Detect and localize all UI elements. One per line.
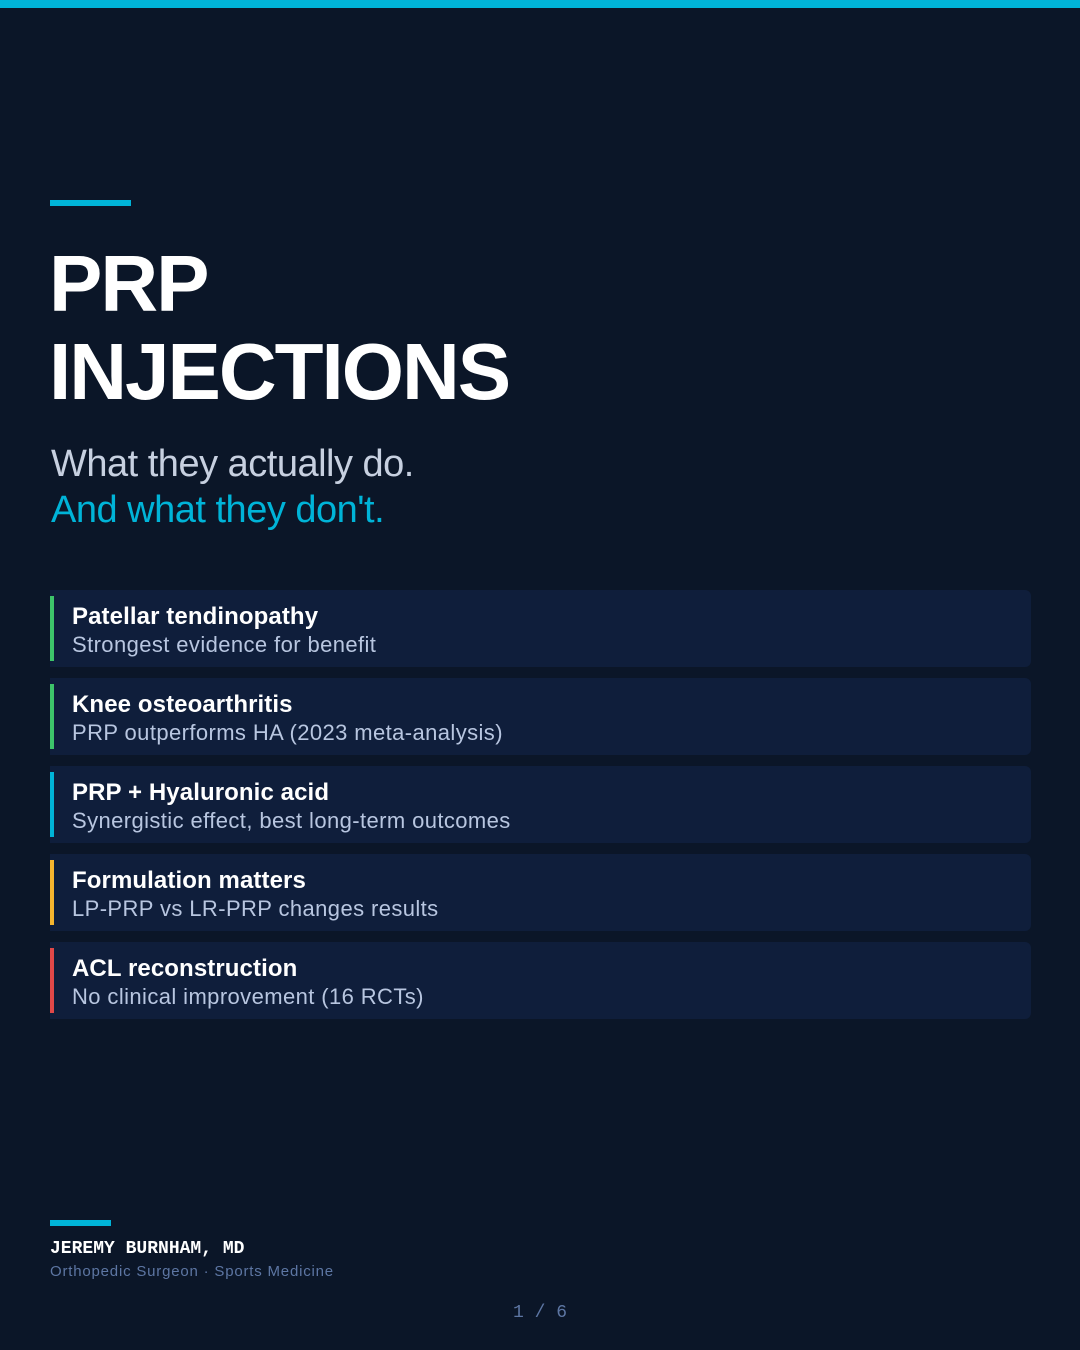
card: formulation: LP-PRP vs LR-PRP changes results bbox=[72, 896, 439, 921]
author accent line bbox=[50, 1220, 111, 1226]
card: PRP + HA: PRP + Hyaluronic acid bbox=[72, 779, 329, 806]
card: PRP + HA bbox=[50, 766, 1031, 843]
card: ACL bbox=[50, 942, 1031, 1019]
title: INJECTIONS bbox=[49, 327, 509, 416]
subtitle: What they actually do. bbox=[51, 443, 414, 485]
title: PRP bbox=[49, 239, 208, 328]
subtitle: And what they don't. bbox=[51, 489, 384, 531]
card: knee osteoarthritis: Knee osteoarthritis bbox=[72, 691, 293, 718]
title bbox=[49, 239, 509, 416]
author name: JEREMY BURNHAM, MD bbox=[50, 1239, 244, 1259]
top accent bar bbox=[0, 0, 1080, 8]
card: knee osteoarthritis bbox=[50, 678, 1031, 755]
card: ACL: ACL reconstruction bbox=[72, 955, 297, 982]
card: formulation bbox=[50, 854, 1031, 931]
card: PRP + HA: Synergistic effect, best long-term outcomes bbox=[72, 808, 511, 833]
page number: 1 / 6 bbox=[513, 1303, 567, 1323]
title accent line bbox=[50, 200, 131, 206]
card: ACL: No clinical improvement (16 RCTs) bbox=[72, 984, 424, 1009]
author role: Orthopedic Surgeon · Sports Medicine bbox=[50, 1263, 334, 1280]
card: patellar tendinopathy bbox=[50, 590, 1031, 667]
card: patellar tendinopathy: Strongest evidence for benefit bbox=[72, 632, 376, 657]
card: patellar tendinopathy: Patellar tendinopathy bbox=[72, 603, 318, 630]
card: formulation: Formulation matters bbox=[72, 867, 306, 894]
card: knee osteoarthritis: PRP outperforms HA (2023 meta-analysis) bbox=[72, 720, 503, 745]
subtitle bbox=[51, 443, 414, 531]
